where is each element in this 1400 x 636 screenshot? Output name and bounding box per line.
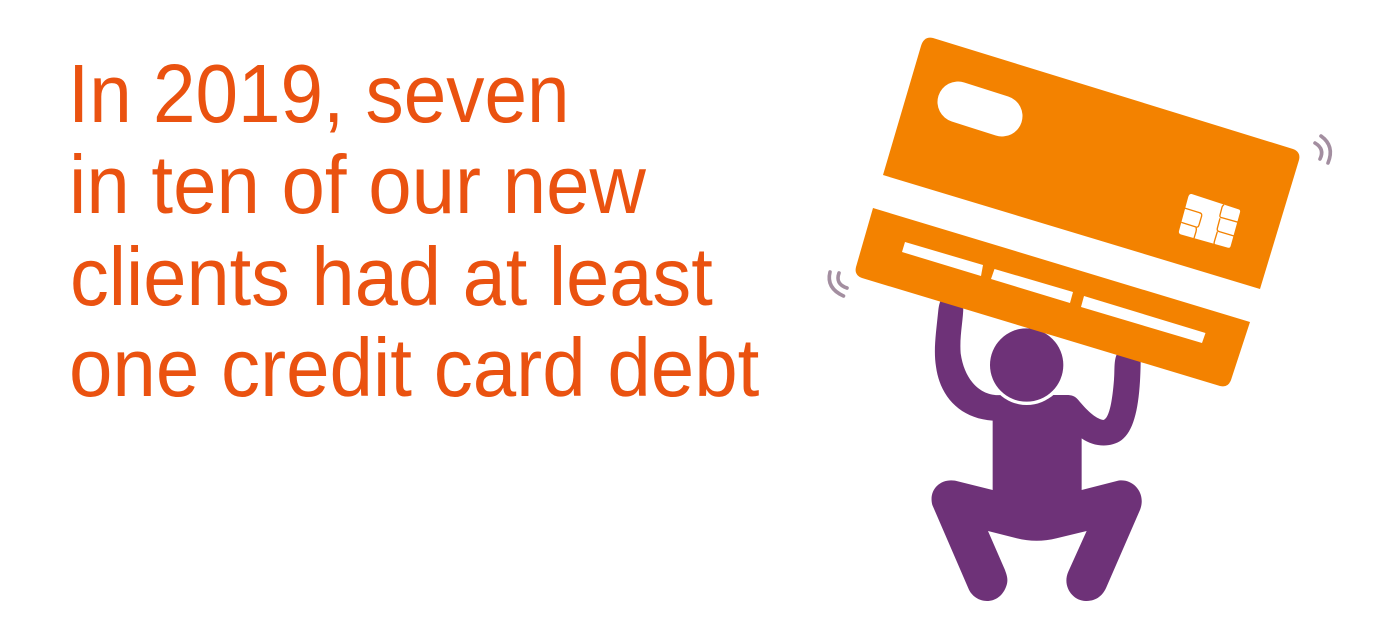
card lower section [856,208,1250,386]
icon: motion marks left [829,272,847,296]
chip [1179,194,1240,248]
icon: credit card [856,38,1299,386]
title: headline statement: clients had at least [70,230,712,323]
title: headline statement: in ten of our new [68,138,645,231]
title: headline statement: one credit card debt [69,321,759,414]
icon: motion marks right [1315,136,1330,163]
signature stripes [902,242,1206,343]
title: headline statement [68,47,759,414]
title: headline statement: In 2019, seven [68,47,570,140]
card upper section [883,38,1299,289]
icon: purple person [932,297,1142,601]
card window pill [958,102,1002,116]
